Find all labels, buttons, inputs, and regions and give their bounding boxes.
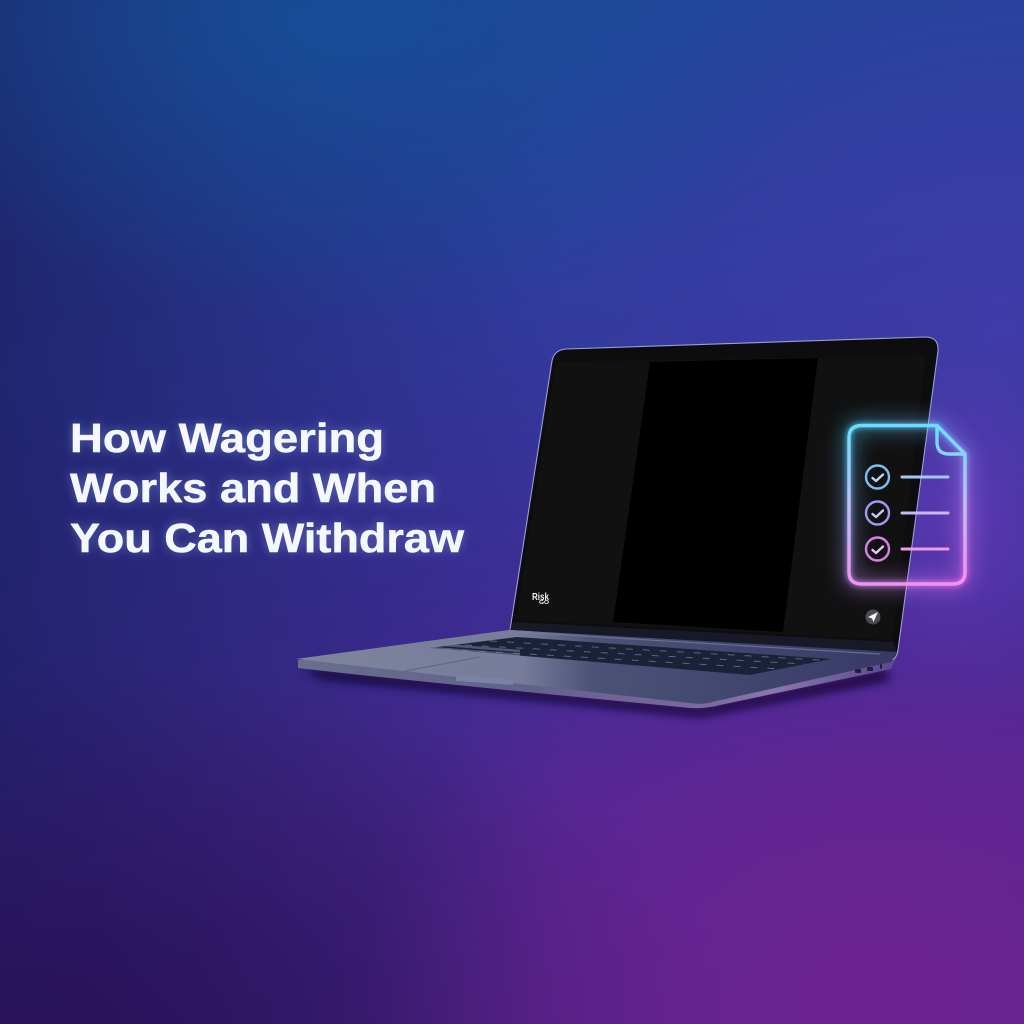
hinge highlight (516, 632, 880, 654)
title: Works and When (70, 464, 436, 511)
document outline (849, 426, 965, 584)
laptop base (296, 630, 897, 708)
check row 1 (866, 466, 948, 488)
screen logo (532, 592, 549, 606)
laptop lid (510, 337, 938, 662)
keyboard (430, 637, 831, 675)
check row 2 (866, 502, 948, 524)
title: How Wagering (70, 415, 384, 461)
folded corner (937, 426, 965, 454)
screen logo: GO (539, 600, 549, 606)
title: How Wagering (70, 414, 384, 461)
icon: neon checklist document (849, 426, 965, 584)
laptop shadow (304, 668, 888, 716)
document glow (849, 426, 965, 584)
screen logo: Risk (532, 592, 549, 603)
screen dark centre panel (613, 358, 818, 632)
side ports (855, 664, 882, 673)
title: You Can Withdraw (70, 514, 464, 561)
trackpad line (405, 657, 480, 671)
lower bezel (510, 622, 897, 652)
title (70, 414, 464, 561)
screen badge icon (866, 610, 880, 624)
screen panel (516, 355, 926, 640)
title: Works and When (70, 465, 436, 511)
title: You Can Withdraw (70, 515, 464, 561)
laptop (296, 337, 938, 716)
front notch (456, 675, 513, 685)
check row 3 (866, 538, 948, 560)
